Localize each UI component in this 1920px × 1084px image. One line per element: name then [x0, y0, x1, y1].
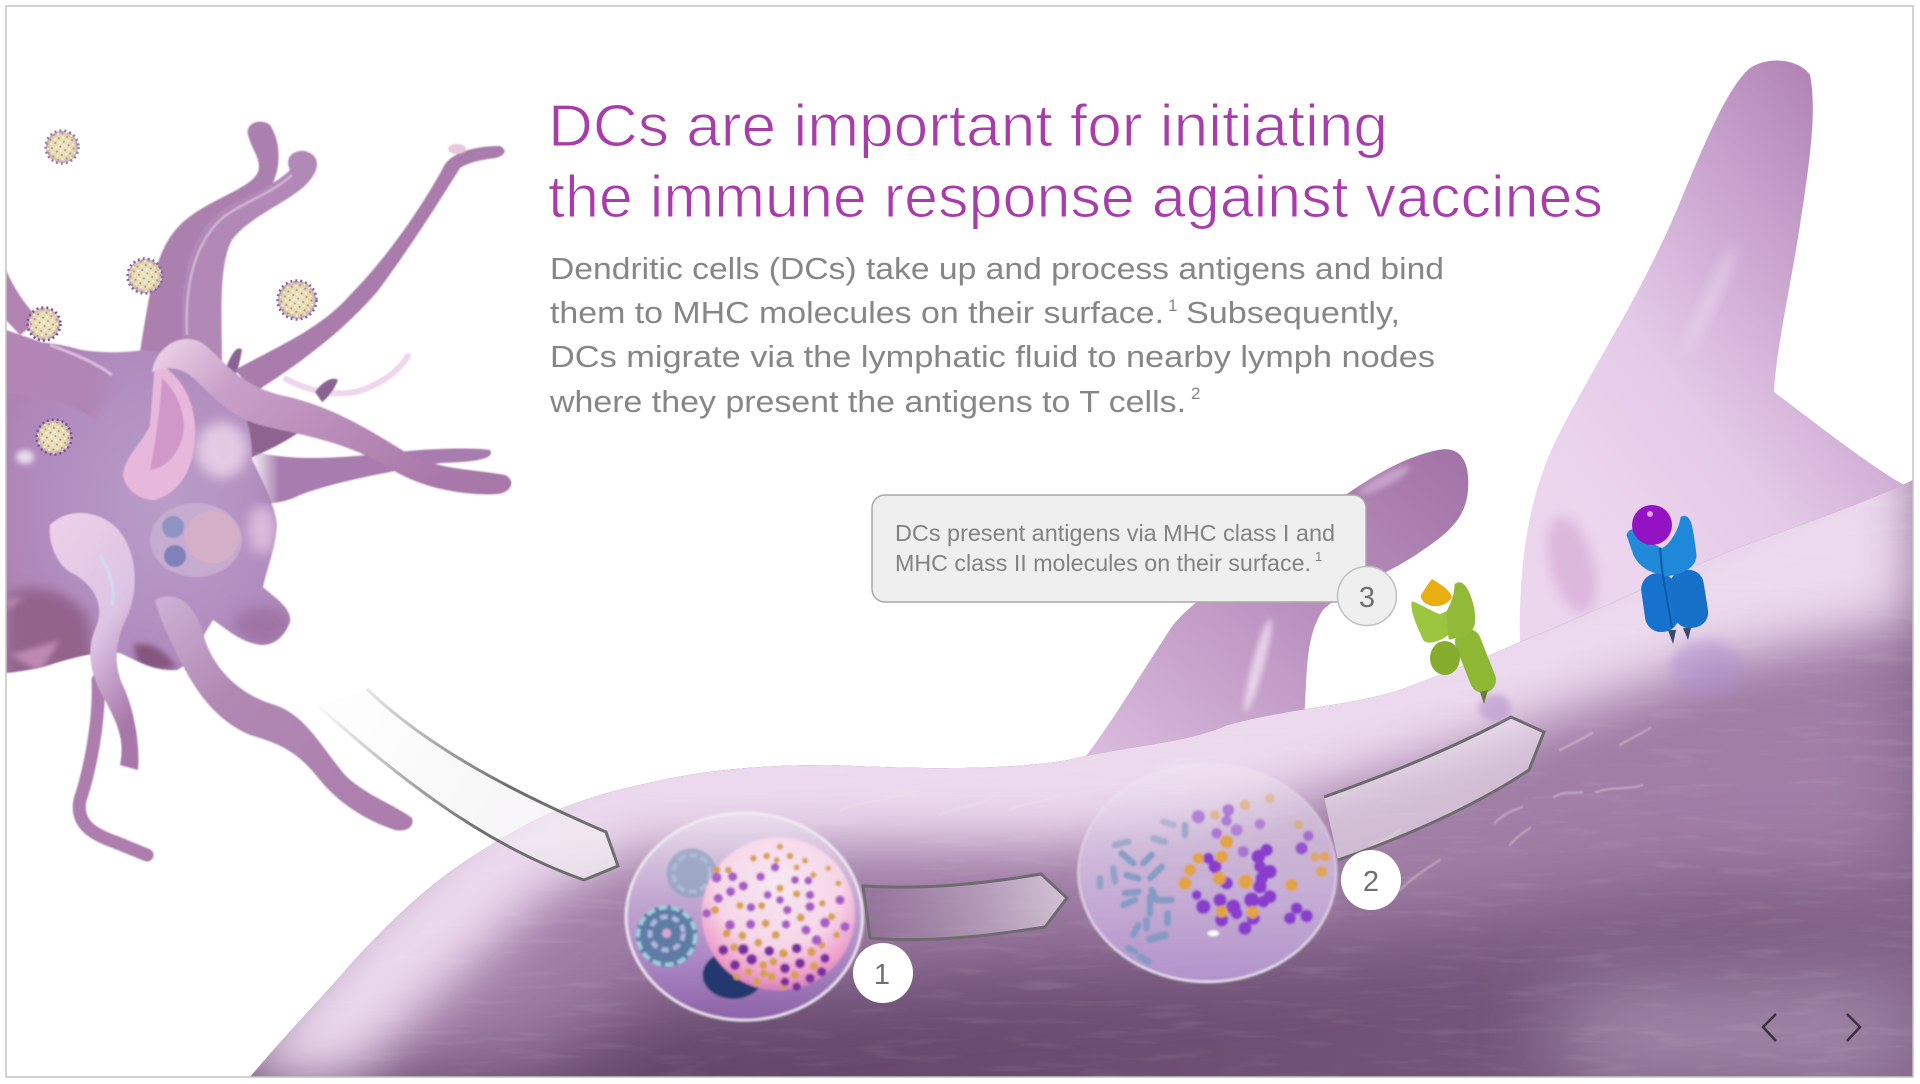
stem domain: [1468, 642, 1483, 680]
surface flecks: [1370, 726, 1652, 892]
antigen peptide (yellow): [1421, 579, 1452, 606]
nav arrow: next: [1847, 1014, 1860, 1041]
MHC class I molecule (green): [1413, 579, 1511, 722]
body text: them to MHC molecules on their surface.: [550, 296, 1164, 330]
thin lower-left dendrite: [79, 680, 147, 855]
domain seam: [1660, 548, 1672, 628]
blue capsid upper: [667, 848, 717, 898]
step 2: antigen processing orb: [1078, 763, 1336, 982]
dendrite upper centre: [182, 151, 317, 365]
dark lower left folds: [6, 588, 98, 680]
left upper domain: [1413, 603, 1450, 641]
lower dendrite: [155, 596, 413, 830]
lower right lighter patch: [1560, 990, 1913, 1077]
cell process: large horn at right: [1520, 61, 1913, 650]
pale fold on body: [123, 362, 195, 500]
body text: 2: [1191, 384, 1200, 403]
cell body: [6, 330, 296, 680]
particle 4: [28, 308, 60, 340]
dark inner capsid: [703, 951, 764, 999]
vaccine particles floating: [28, 130, 316, 454]
title: DCs are important for initiating: [548, 93, 1388, 159]
vaccine particle sphere: [702, 837, 855, 991]
callout: [872, 495, 1366, 602]
title: [548, 93, 1603, 230]
step marker 3: [1338, 566, 1396, 626]
particle 3: [278, 280, 316, 320]
body text: where they present the antigens to T cells.: [549, 385, 1186, 419]
purple peptides: [1192, 804, 1314, 935]
arrow: step 1 to step 2: [863, 874, 1067, 940]
body text: [549, 252, 1444, 419]
step marker 1: 1: [874, 959, 890, 991]
callout: 1: [1315, 549, 1322, 564]
orange peptides: [1178, 793, 1330, 919]
lower round domain: [1430, 641, 1460, 675]
cell process: finger behind the callout: [1075, 449, 1468, 770]
particle 5: [36, 420, 72, 454]
specular highlight: [1208, 930, 1219, 936]
light tone band: [250, 480, 1912, 1076]
dendritic cell: [6, 122, 511, 855]
step marker 2: [1341, 850, 1401, 910]
orange spikes: [711, 844, 841, 990]
vaccine particle inside cell: [150, 503, 242, 577]
body text: DCs migrate via the lymphatic fluid to nearby lymph nodes: [550, 340, 1435, 374]
dark spikes behind body: [226, 348, 338, 402]
body text: Subsequently,: [1186, 296, 1400, 330]
transmembrane foot: [1480, 690, 1488, 704]
dendrite long upper right: [235, 146, 505, 392]
particle 1: [46, 130, 78, 164]
pale ribbon lower left: [50, 513, 138, 770]
transmembrane legs: [1668, 628, 1691, 644]
dendrite right horizontal: [248, 448, 491, 503]
upper left domain: [1628, 531, 1664, 573]
blue capsid lower: [636, 905, 697, 967]
lymph node cell surface: [250, 480, 1912, 1076]
callout: MHC class II molecules on their surface.: [895, 550, 1311, 576]
MHC class II molecule (blue): [1628, 505, 1742, 696]
lower right lobe shading: [234, 607, 290, 643]
callout: DCs present antigens via MHC class I and: [895, 520, 1335, 546]
upper right pink glow: [196, 422, 248, 478]
dark underside behind ribbon: [246, 420, 298, 458]
thick upper left arm: [6, 330, 98, 416]
membrane shadow: [1479, 694, 1511, 722]
upper right domain: [1662, 517, 1695, 575]
membrane shadow: [1670, 640, 1742, 696]
processed protein strands: [1100, 822, 1185, 962]
arrow: step 2 to step 3: [1324, 717, 1544, 860]
lower right domain: [1668, 568, 1710, 630]
faint background filament: [286, 356, 408, 393]
ribbon dendrite: [152, 339, 511, 494]
title: the immune response against vaccines: [548, 164, 1603, 230]
body text: 1: [1168, 296, 1177, 315]
pale tip of long dendrite: [448, 144, 466, 154]
nav arrow: previous: [1763, 1014, 1776, 1041]
purple spikes: [702, 863, 850, 945]
step marker 1: [853, 943, 913, 1003]
antigen peptide (purple): [1632, 505, 1672, 545]
right upper domain: [1448, 584, 1474, 638]
step 1: antigen uptake orb: [626, 813, 863, 1020]
surface texture: [524, 654, 1912, 1076]
body text: Dendritic cells (DCs) take up and process antigens and bind: [550, 252, 1444, 286]
step marker 3: 3: [1359, 582, 1375, 614]
step marker 2: 2: [1363, 866, 1379, 898]
glossy spot: [16, 450, 34, 464]
left short dendrites: [6, 270, 40, 335]
dendrite upper left: [140, 122, 279, 355]
mid tone band: [252, 480, 1912, 1076]
arrow: cell to step 1: [318, 689, 618, 880]
particle 2: [128, 258, 162, 294]
lower left domain: [1639, 571, 1681, 634]
